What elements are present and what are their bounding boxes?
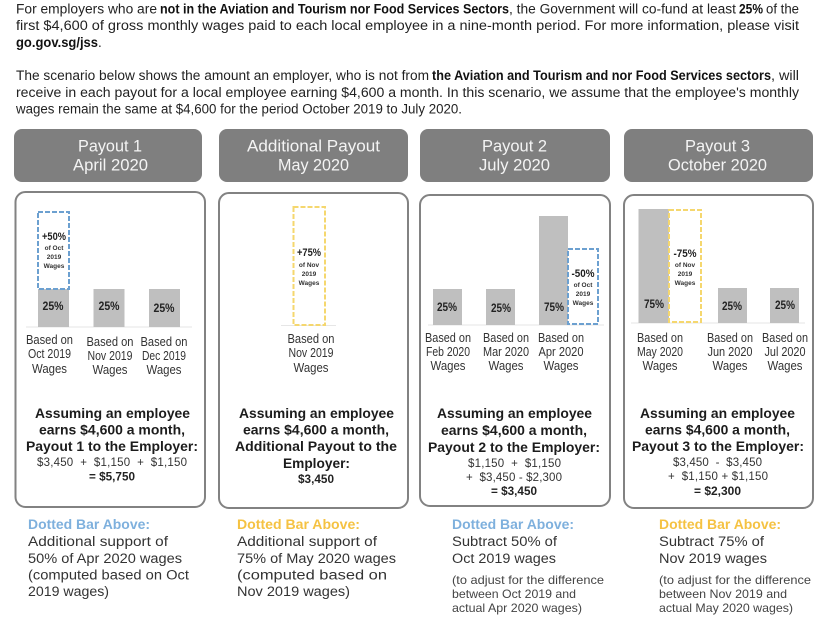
bar chart: payout 3: Based on — [637, 331, 683, 345]
bar chart: payout 1: Wages — [44, 263, 65, 270]
bar chart: payout 2: -50% — [572, 268, 595, 280]
note: payout 1 dotted bar: Additional support of — [28, 534, 168, 549]
calculation: additional payout: Employer: — [283, 456, 350, 471]
bar chart: payout 2: Based on — [538, 331, 584, 345]
panel: additional payout — [219, 129, 408, 599]
bar chart: payout 1: Dec 2019 — [142, 349, 186, 363]
note: payout 1 dotted bar — [28, 517, 189, 599]
bar chart: payout 2: 25% — [437, 300, 457, 314]
bar chart: payout 1: Wages — [92, 363, 128, 377]
calculation: payout 2: Assuming an employee — [437, 406, 593, 421]
intro text: of the — [766, 2, 799, 16]
calculation: payout 1: Assuming an employee — [35, 406, 191, 421]
bar chart: payout 2: Feb 2020 — [426, 345, 470, 359]
calculation: additional payout — [235, 406, 398, 486]
bar chart: payout 3: Based on — [762, 331, 808, 345]
note: additional payout dotted bar: 75% of May 2020 wages — [237, 551, 396, 566]
intro text: 25% — [739, 2, 763, 16]
intro text: wages remain the same at $4,600 for the period October 2019 to July 2020. — [15, 102, 462, 116]
bar chart: payout 3: of Nov — [675, 262, 695, 269]
calculation: payout 3: $3,450 - $3,450 — [673, 457, 762, 469]
header: payout 2: July 2020 — [479, 156, 550, 174]
bar chart: payout 2: Wages — [488, 359, 524, 373]
bar chart: payout 3: Wages — [712, 359, 748, 373]
header: payout 2 — [420, 129, 610, 182]
bar chart: payout 3: 25% — [775, 298, 795, 312]
bar chart: payout 1: Wages — [146, 363, 182, 377]
bar chart: payout 1 — [26, 212, 192, 377]
bar chart: payout 2: 25% — [491, 301, 511, 315]
bar chart: payout 2: Wages — [544, 359, 578, 373]
header: payout 3 — [624, 129, 813, 182]
bar chart: additional payout — [281, 207, 336, 375]
header: payout 1 — [14, 129, 202, 182]
panel: payout 1 — [14, 129, 205, 599]
bar chart: payout 3: Based on — [707, 331, 753, 345]
bar chart: additional payout: Wages — [294, 361, 328, 375]
bar chart: payout 1: Nov 2019 — [88, 349, 133, 363]
intro text: , will — [771, 68, 799, 83]
bar chart: payout 3: Jul 2020 — [764, 345, 806, 359]
bar chart: payout 2: Based on — [483, 331, 529, 345]
note: payout 1 dotted bar: 2019 wages) — [28, 584, 109, 599]
bar chart: payout 2: Wages — [430, 359, 466, 373]
header: payout 3: Payout 3 — [685, 136, 750, 156]
bar chart: payout 3: 2019 — [678, 271, 693, 278]
panel: payout 3 — [624, 129, 813, 615]
note: payout 2 dotted bar: Oct 2019 wages — [452, 551, 556, 566]
bar chart: payout 2: Apr 2020 — [538, 345, 584, 359]
bar chart: payout 3 — [631, 209, 808, 373]
calculation: payout 2: + $3,450 - $2,300 — [466, 472, 562, 484]
bar chart: payout 2: Based on — [425, 331, 471, 345]
bar chart: payout 3: Wages — [675, 280, 696, 287]
calculation: additional payout: Assuming an employee — [239, 406, 395, 421]
header: payout 3: October 2020 — [668, 156, 767, 174]
bar chart: additional payout: Based on — [288, 332, 335, 346]
bar chart: payout 3: May 2020 — [637, 345, 683, 359]
panel: payout 2 — [420, 129, 610, 615]
note: payout 3 dotted bar: between Nov 2019 and — [659, 587, 787, 601]
bar chart: payout 1: 25% — [42, 299, 64, 313]
calculation: payout 3: earns $4,600 a month, — [645, 422, 790, 438]
bar chart: payout 2 — [425, 216, 604, 373]
bar chart: payout 2: 2019 — [576, 291, 591, 298]
intro text: the Aviation and Tourism and nor Food Services sectors — [432, 68, 771, 83]
calculation: payout 1: earns $4,600 a month, — [39, 422, 185, 438]
calculation: additional payout: earns $4,600 a month, — [243, 422, 389, 438]
note: payout 2 dotted bar: Dotted Bar Above: — [452, 517, 574, 532]
note: payout 3 dotted bar: Dotted Bar Above: — [659, 517, 781, 532]
calculation: payout 1 — [26, 406, 198, 484]
calculation: payout 3: Assuming an employee — [640, 406, 796, 421]
intro text: first $4,600 of gross monthly wages paid to each local employee in a nine-month period. For more information, please visit — [16, 18, 799, 33]
note: payout 3 dotted bar: (to adjust for the difference — [659, 573, 811, 587]
intro text: For employers who are — [16, 2, 157, 16]
intro text: receive in each payout for a local employee earning $4,600 a month. In this scenario, we assume that the employee's monthly — [16, 85, 799, 100]
intro text: The scenario below shows the amount an employer, who is not from — [16, 68, 429, 83]
intro text: go.gov.sg/jss — [16, 35, 98, 50]
intro text: not in the Aviation and Tourism nor Food Services Sectors — [160, 2, 509, 16]
calculation: payout 2 — [428, 406, 600, 498]
note: payout 1 dotted bar: (computed based on Oct — [28, 568, 189, 582]
bar chart: payout 3: Wages — [768, 359, 802, 373]
note: payout 1 dotted bar: 50% of Apr 2020 wages — [28, 551, 182, 566]
note: payout 1 dotted bar: Dotted Bar Above: — [28, 517, 150, 532]
bar chart: additional payout: Wages — [299, 280, 320, 287]
note: additional payout dotted bar — [237, 517, 396, 599]
header: payout 1: April 2020 — [73, 156, 148, 174]
bar chart: payout 2: Mar 2020 — [483, 345, 529, 359]
bar chart: payout 3: 75% — [644, 297, 664, 311]
calculation: additional payout: Additional Payout to the — [235, 439, 398, 454]
bar chart: payout 3: Wages — [642, 359, 678, 373]
calculation: payout 1: $3,450 + $1,150 + $1,150 — [37, 457, 187, 469]
bar chart: payout 1: Based on — [26, 333, 73, 347]
bar chart: payout 2: 75% — [544, 300, 564, 314]
card outline: payout 2 — [420, 195, 610, 506]
intro text — [15, 2, 799, 116]
card outline: payout 1 — [16, 192, 205, 507]
bar chart: payout 2: of Oct — [574, 282, 593, 289]
calculation: payout 3: = $2,300 — [694, 486, 741, 498]
bar chart: additional payout: +75% — [297, 247, 321, 259]
note: payout 2 dotted bar: Subtract 50% of — [452, 534, 557, 549]
bar chart: payout 1: 2019 — [47, 254, 62, 261]
bar chart: payout 3: Jun 2020 — [708, 345, 753, 359]
calculation: payout 2: $1,150 + $1,150 — [468, 458, 561, 470]
note: payout 2 dotted bar — [452, 517, 604, 615]
calculation: additional payout: $3,450 — [298, 474, 334, 486]
note: payout 2 dotted bar: (to adjust for the difference — [452, 573, 604, 587]
header: additional payout: May 2020 — [278, 156, 349, 174]
bar chart: payout 1: of Oct — [45, 245, 64, 252]
note: payout 3 dotted bar: Nov 2019 wages — [659, 551, 767, 566]
bar chart: payout 1: Wages — [32, 362, 67, 376]
calculation: payout 3: + $1,150 + $1,150 — [668, 471, 768, 483]
note: payout 2 dotted bar: actual Apr 2020 wages) — [452, 601, 582, 615]
note: payout 3 dotted bar: Subtract 75% of — [659, 534, 764, 549]
calculation: payout 1: = $5,750 — [89, 472, 135, 484]
note: additional payout dotted bar: (computed based on — [237, 568, 387, 582]
calculation: payout 2: Payout 2 to the Employer: — [428, 440, 600, 455]
calculation: payout 2: earns $4,600 a month, — [441, 423, 587, 438]
header: payout 1: Payout 1 — [78, 136, 142, 156]
bar chart: payout 1: Based on — [86, 335, 134, 349]
bar chart: additional payout: 2019 — [302, 271, 317, 278]
note: additional payout dotted bar: Dotted Bar Above: — [237, 517, 360, 532]
note: additional payout dotted bar: Nov 2019 wages) — [237, 584, 350, 599]
note: additional payout dotted bar: Additional support of — [237, 534, 377, 549]
calculation: payout 3 — [632, 406, 804, 498]
bar chart: payout 1: 25% — [154, 301, 175, 315]
bar chart: payout 3: -75% — [674, 248, 697, 260]
note: payout 3 dotted bar: actual May 2020 wages) — [659, 601, 793, 615]
calculation: payout 1: Payout 1 to the Employer: — [26, 439, 198, 454]
calculation: payout 2: = $3,450 — [491, 486, 537, 498]
bar chart: additional payout: of Nov — [299, 262, 319, 269]
bar chart: payout 1: Based on — [140, 335, 188, 349]
header: additional payout — [219, 129, 408, 182]
note: payout 3 dotted bar — [659, 517, 811, 615]
intro text: . — [98, 35, 102, 50]
bar chart: additional payout: Nov 2019 — [288, 346, 334, 360]
bar chart: payout 1: 25% — [98, 299, 120, 313]
intro text: , the Government will co-fund at least — [509, 2, 736, 16]
bar chart: payout 3: 25% — [722, 299, 742, 313]
card outline: payout 3 — [624, 195, 813, 508]
header: additional payout: Additional Payout — [247, 136, 380, 156]
note: payout 2 dotted bar: between Oct 2019 and — [452, 587, 576, 601]
bar chart: payout 1: Oct 2019 — [28, 347, 71, 361]
calculation: payout 3: Payout 3 to the Employer: — [632, 439, 804, 454]
bar chart: payout 1: +50% — [42, 231, 66, 243]
bar chart: payout 2: Wages — [573, 300, 594, 307]
card outline: additional payout — [219, 193, 408, 508]
header: payout 2: Payout 2 — [482, 136, 547, 156]
